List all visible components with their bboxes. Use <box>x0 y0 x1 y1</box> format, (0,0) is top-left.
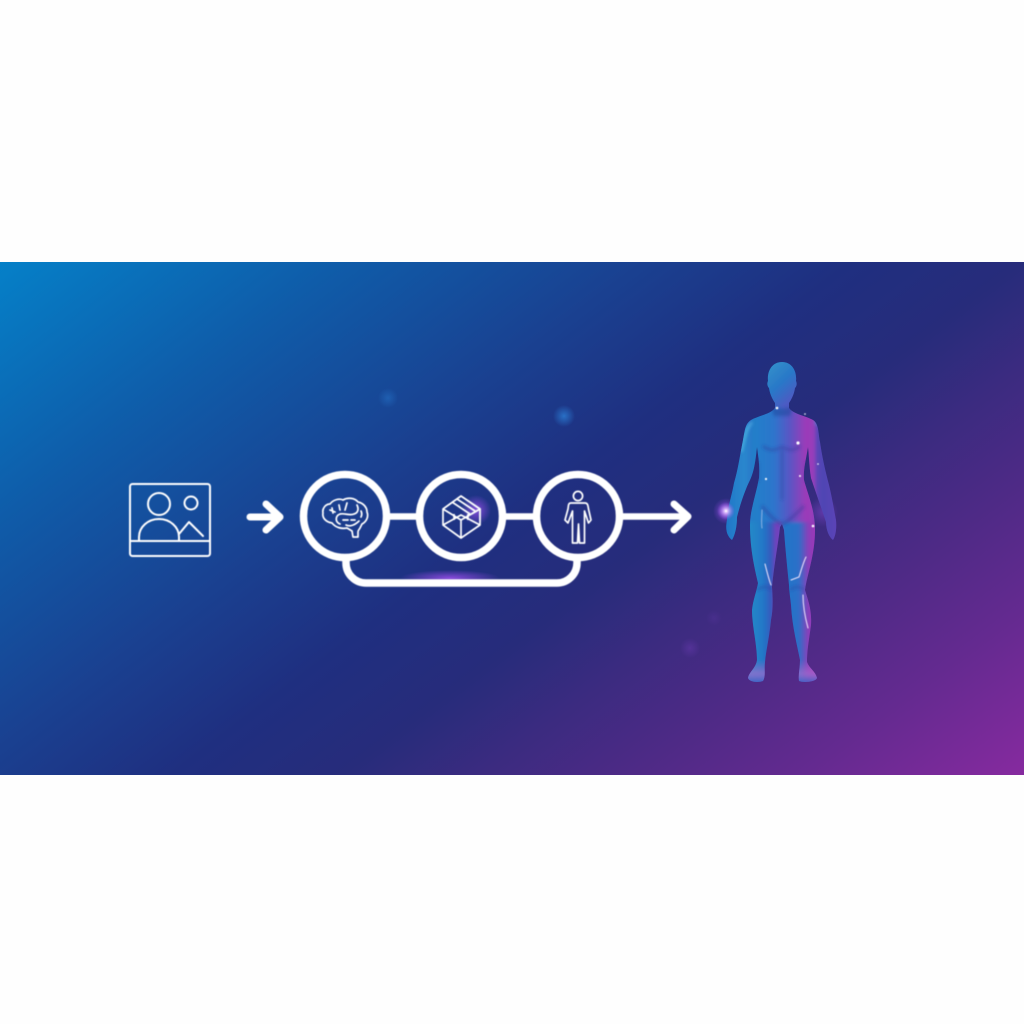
icon: brain <box>323 498 368 537</box>
glow on box corner <box>461 495 491 525</box>
bright glow on left wrist <box>717 502 735 520</box>
icon: wireframe box <box>443 496 480 538</box>
icon: image input frame <box>130 484 210 556</box>
figure: darkening overlay <box>726 362 836 682</box>
feedback loop connector <box>346 558 577 583</box>
figure: colour layers <box>726 362 836 682</box>
stage 3: person circle <box>536 474 620 558</box>
icon: standing person <box>565 491 591 543</box>
figure: 3D human body <box>726 362 836 682</box>
glow behind figure hands <box>713 497 838 527</box>
figure specular highlights <box>762 407 819 628</box>
stage 1: brain circle <box>304 474 386 558</box>
background glow particles <box>378 388 722 658</box>
figure: neck shadow <box>772 406 793 417</box>
connectors between stages <box>386 513 537 520</box>
glow under feedback loop <box>400 570 500 586</box>
arrow: pipeline to 3D human <box>620 504 688 530</box>
arrow: input to pipeline <box>250 504 280 530</box>
stage 2: 3D box circle <box>420 474 502 558</box>
figure: shoulder rim light <box>741 422 752 452</box>
panel: gradient band <box>0 262 1024 775</box>
figure: muscle shading <box>757 446 806 590</box>
